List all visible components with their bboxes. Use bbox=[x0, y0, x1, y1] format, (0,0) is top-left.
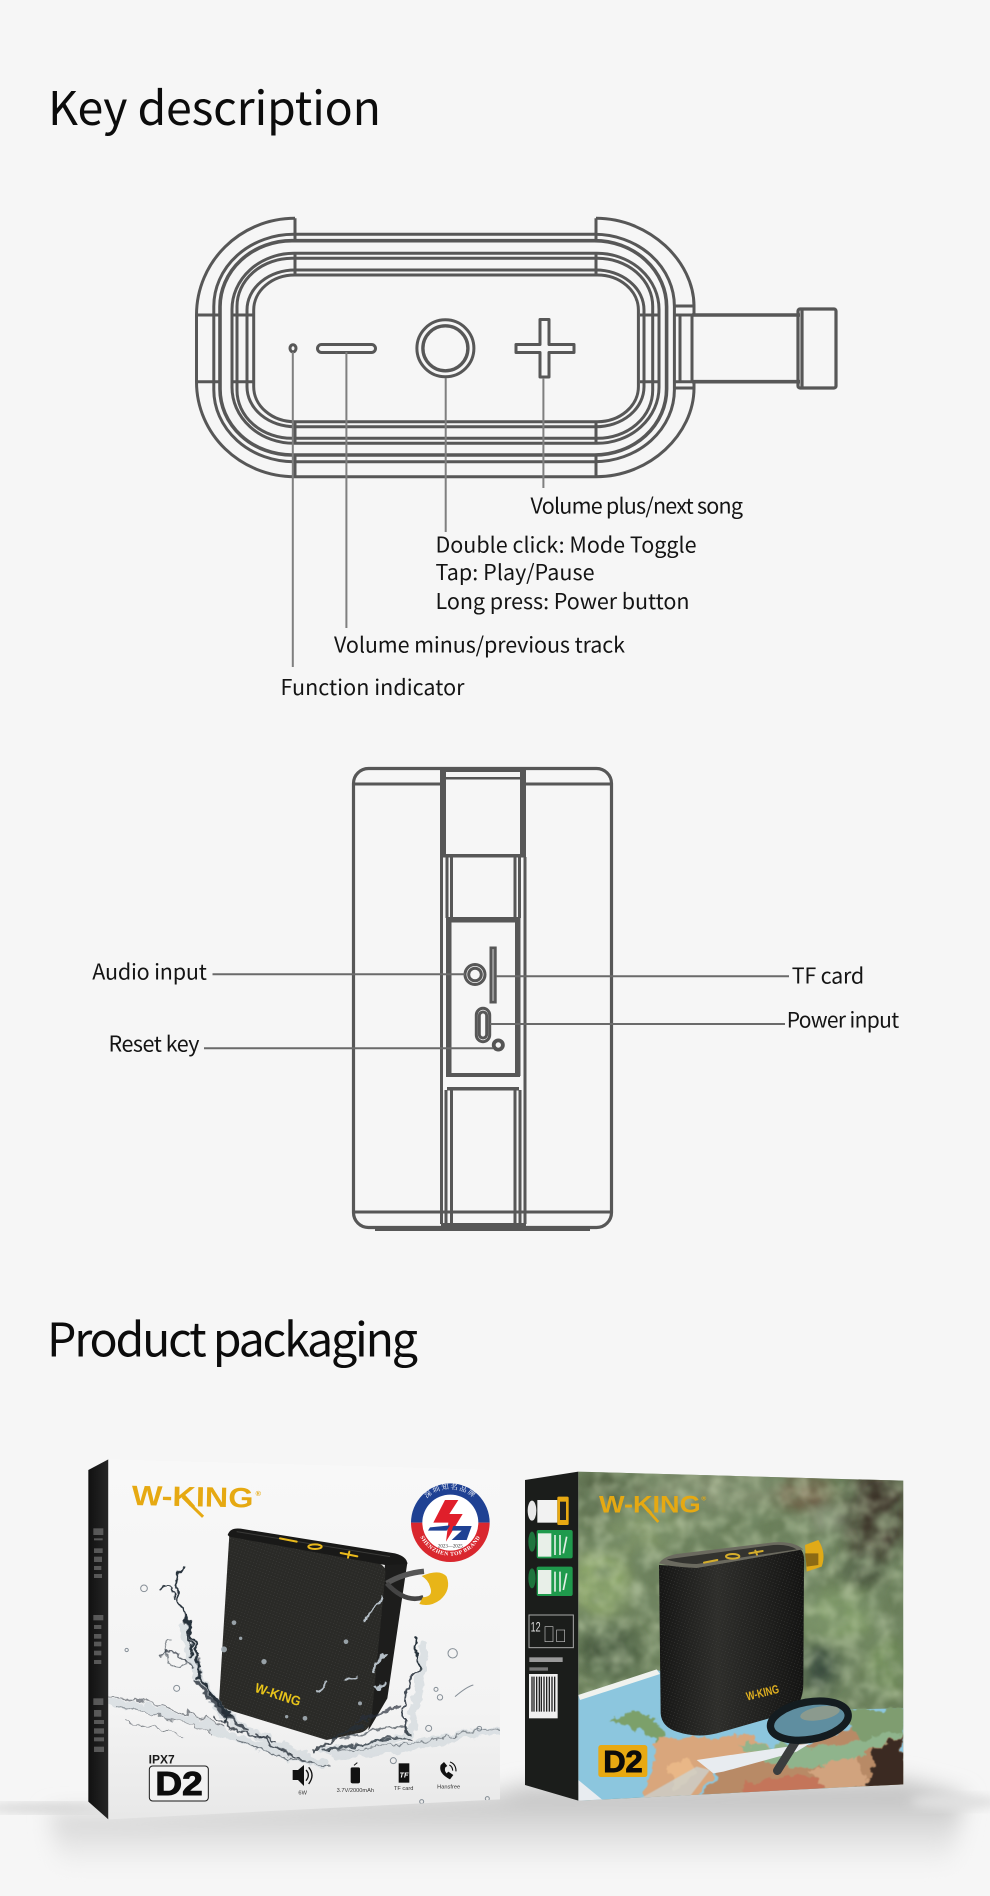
leader: reset key bbox=[204, 1047, 493, 1049]
back body outline bbox=[354, 768, 612, 1230]
box side panel bbox=[525, 1472, 578, 1801]
icon: USB power port bbox=[476, 1008, 490, 1042]
leader: volume minus bbox=[345, 352, 347, 628]
box side panel: 12 bbox=[531, 1619, 541, 1635]
leader: power button bbox=[445, 378, 447, 532]
feature icons row: TF card bbox=[394, 1786, 413, 1792]
water splash bbox=[108, 1567, 500, 1804]
label: reset key: Reset key bbox=[108, 1028, 200, 1059]
label: audio input: Audio input bbox=[92, 955, 207, 986]
diagram: speaker back view with ports bbox=[354, 768, 612, 1230]
model label IPX7 D2 bbox=[149, 1752, 208, 1803]
label: TF card: TF card bbox=[792, 959, 864, 990]
blurred forest background bbox=[578, 1470, 905, 1803]
handle strap and cap bbox=[692, 309, 836, 388]
badge: Shenzhen top brand: 2023—2025 bbox=[438, 1545, 463, 1550]
speaker photo bbox=[219, 1528, 448, 1740]
feature icons row: 6W bbox=[298, 1791, 308, 1797]
photo front panel bbox=[570, 1470, 910, 1803]
label: volume minus: Volume minus/previous track bbox=[334, 628, 625, 660]
icon: function indicator dot bbox=[290, 345, 296, 352]
label: power input: Power input bbox=[787, 1004, 899, 1034]
floor shadow under boxes bbox=[0, 1780, 990, 1872]
brand logo: W-KING bbox=[599, 1492, 701, 1519]
model label IPX7 D2: D2 bbox=[155, 1766, 203, 1803]
icon: audio jack bbox=[465, 964, 485, 984]
magnifying glass bbox=[767, 1695, 851, 1771]
leader: volume plus bbox=[542, 378, 544, 488]
brand logo: W-KING bbox=[132, 1480, 254, 1514]
label: mode button functions: Tap: Play/Pause bbox=[436, 556, 594, 587]
title: Key description: Key description bbox=[48, 72, 381, 139]
leader: function indicator bbox=[292, 352, 294, 667]
box front panel bbox=[108, 1459, 500, 1819]
package: photo box with map bbox=[525, 1470, 910, 1803]
icon: reset hole bbox=[494, 1040, 503, 1050]
badge: Shenzhen top brand: 深圳知名品牌 bbox=[424, 1484, 476, 1498]
icon: TF card slot bbox=[491, 948, 495, 1002]
speaker photo: W-KING bbox=[745, 1682, 780, 1704]
model badge D2: D2 bbox=[603, 1745, 643, 1779]
brand logo: ® bbox=[255, 1489, 262, 1498]
speaker photo: W-KING bbox=[253, 1680, 303, 1709]
speaker photo bbox=[659, 1540, 824, 1735]
diagram: speaker top view with buttons bbox=[196, 218, 836, 477]
leader: TF card bbox=[496, 975, 789, 977]
feature icons row: Hansfree bbox=[437, 1784, 460, 1790]
feature icons row bbox=[293, 1762, 460, 1797]
strap column bbox=[440, 769, 526, 1228]
icon: plus button bbox=[516, 320, 574, 377]
label: function indicator: Function indicator bbox=[280, 671, 465, 702]
speaker shell outline bbox=[196, 218, 694, 477]
icon: power button ring bbox=[417, 320, 474, 377]
leader: audio input bbox=[212, 973, 465, 975]
label: mode button functions: Double click: Mode Toggle bbox=[436, 528, 696, 560]
feature icons row: TF bbox=[400, 1770, 409, 1779]
label: volume plus: Volume plus/next song bbox=[530, 490, 743, 520]
folded world map bbox=[578, 1669, 903, 1803]
badge: Shenzhen top brand: SHENZHEN TOP BRAND bbox=[420, 1536, 480, 1556]
package: white box with splash bbox=[88, 1459, 500, 1820]
model label IPX7 D2: IPX7 bbox=[149, 1752, 175, 1766]
title: Product packaging: Product packaging bbox=[47, 1304, 418, 1370]
feature icons row: 3.7V/2000mAh bbox=[337, 1788, 374, 1794]
label: mode button functions: Long press: Power button bbox=[436, 585, 690, 616]
badge: Shenzhen top brand bbox=[411, 1483, 490, 1562]
brand logo: ® bbox=[701, 1495, 706, 1503]
leader: power input bbox=[490, 1023, 785, 1025]
icon: minus button bbox=[318, 344, 376, 352]
label: mode button functions bbox=[436, 528, 696, 616]
box side panel bbox=[88, 1459, 108, 1819]
